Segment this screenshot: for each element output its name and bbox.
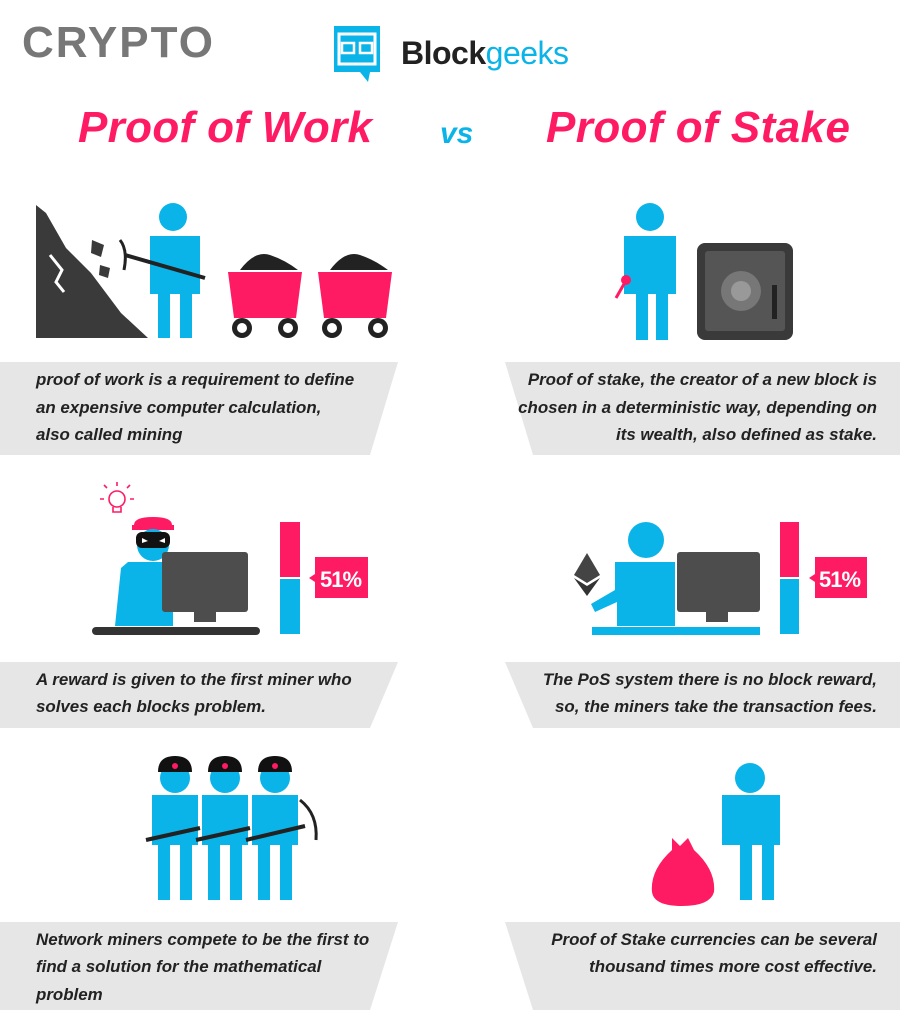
heading: Proof of Work: Proof of Work [78, 103, 375, 152]
text block: reward: A reward is given to the first miner who [35, 670, 352, 689]
panel band row2 left [0, 662, 398, 728]
text block: cost effective [551, 930, 877, 976]
text block: PoW def: also called mining [36, 425, 183, 444]
panel band row1 right [505, 362, 900, 455]
text block: compete: find a solution for the mathematical [36, 957, 322, 976]
text block: compete: problem [35, 985, 103, 1004]
text block: reward: solves each blocks problem. [36, 697, 266, 716]
text block: fees: The PoS system there is no block reward, [543, 670, 877, 689]
heading: vs: vs [440, 117, 473, 150]
text block: reward [35, 670, 352, 716]
text block: fees [543, 670, 877, 716]
text block: compete [35, 930, 369, 1004]
text block: PoW def: proof of work is a requirement to define [35, 370, 354, 389]
text block: cost effective: Proof of Stake currencies can be several [551, 930, 877, 949]
heading: Proof of Stake: Proof of Stake [546, 103, 850, 152]
text block: PoS def: chosen in a deterministic way, depending on [518, 398, 877, 417]
text block: PoW def [35, 370, 354, 444]
text block: PoS def: Proof of stake, the creator of a new block is [528, 370, 877, 389]
logo: Blockgeeks [334, 26, 569, 82]
text block: cost effective: thousand times more cost effective. [589, 957, 877, 976]
panel band row3 left [0, 922, 398, 1010]
icon: hacker at computer 51%: 51% [320, 567, 361, 592]
icon: three miners [146, 756, 316, 900]
text block: fees: so, the miners take the transaction fees. [555, 697, 877, 716]
text block: PoS def: its wealth, also defined as stake. [616, 425, 877, 444]
title: CRYPTO: CRYPTO [22, 18, 215, 67]
text block: PoW def: an expensive computer calculation, [36, 398, 321, 417]
icon: PoS validator 51%: 51% [819, 567, 860, 592]
logo: Blockgeeks: Blockgeeks [401, 35, 569, 71]
icon: hacker at computer 51% [92, 482, 368, 635]
text block: compete: Network miners compete to be the first to [36, 930, 369, 949]
panel band row2 right [505, 662, 900, 728]
icon: person with safe [616, 203, 793, 340]
text block: PoS def [518, 370, 877, 444]
icon: mining scene [36, 203, 392, 338]
icon: person with money bag [652, 763, 780, 906]
panel band row3 right [505, 922, 900, 1010]
panel band row1 left [0, 362, 398, 455]
icon: PoS validator 51% [574, 522, 867, 635]
